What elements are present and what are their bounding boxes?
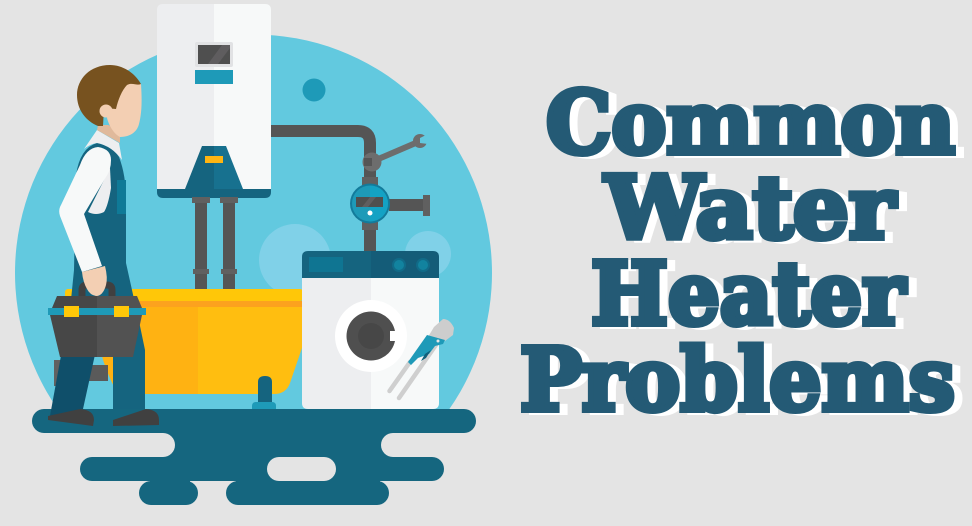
washer door: [335, 300, 407, 372]
spanner wrench: [362, 134, 428, 172]
arm: [59, 147, 111, 272]
background circle: [15, 34, 492, 410]
title shadow: Water: [612, 160, 905, 261]
puddle right notch: [381, 433, 496, 457]
title shadow: Heater: [599, 246, 915, 347]
water heater: [157, 4, 271, 198]
shoes: [48, 409, 94, 426]
title: [520, 73, 955, 431]
title shadow: [528, 75, 963, 433]
puddle left notch: [60, 433, 175, 457]
light bubbles: [259, 224, 451, 296]
ear: [100, 104, 112, 118]
heater control base: [185, 146, 214, 189]
sleeve shadow: [88, 168, 111, 214]
drain pipe: [252, 376, 276, 409]
pipe wrench: [390, 319, 454, 398]
rear leg: [50, 350, 96, 416]
front leg and torso: [66, 143, 145, 409]
title shadow: Common: [554, 75, 963, 176]
water meter: [350, 177, 430, 230]
title: Water: [604, 158, 897, 259]
title: Heater: [591, 244, 907, 345]
floor puddle: [32, 409, 476, 505]
title: Problems: [520, 330, 955, 431]
heater display: [195, 42, 233, 67]
toolbox: [48, 285, 146, 357]
title: Common: [546, 73, 955, 174]
overall pocket: [117, 180, 126, 214]
hand: [82, 266, 107, 296]
washer knobs: [392, 258, 430, 272]
pipe from heater: [268, 131, 370, 254]
bathtub: [65, 289, 303, 394]
puddle gap: [267, 457, 336, 481]
heater supply pipes: [192, 197, 238, 290]
blue dot: [302, 78, 326, 102]
title shadow: Problems: [528, 332, 963, 433]
head: [77, 65, 142, 137]
washing machine: [302, 251, 439, 409]
tub stand: [54, 360, 108, 386]
neck: [97, 125, 120, 143]
collar: [84, 130, 122, 160]
plumber figure: [48, 65, 159, 426]
